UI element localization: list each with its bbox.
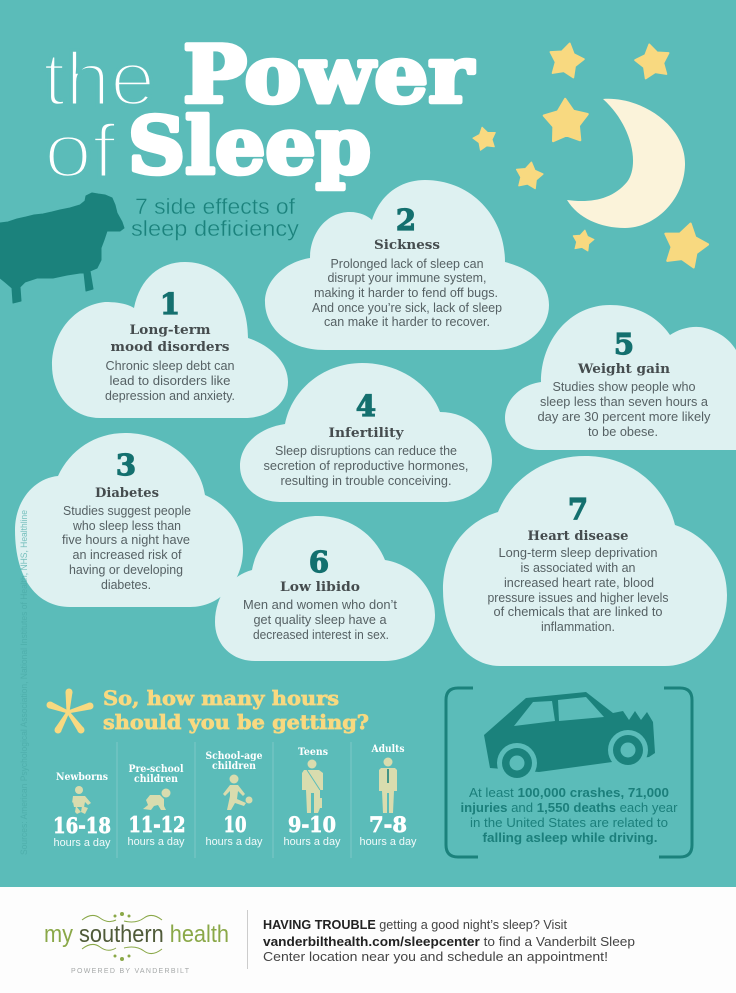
column: adults: Adults — [371, 744, 405, 755]
text: heart body: of chemicals that are linked to — [494, 605, 662, 619]
icon: crawling child — [143, 788, 170, 810]
heading: diabetes: Diabetes — [95, 486, 159, 501]
bracket left — [446, 688, 478, 857]
number 2: 2 — [396, 203, 416, 237]
text: libido body — [243, 598, 397, 642]
text: sickness body — [312, 257, 502, 329]
icon: adult with tie — [379, 758, 397, 813]
bracket right — [659, 688, 692, 857]
text: infertility body: resulting in trouble conceiving. — [280, 474, 452, 488]
text: diabetes body: who sleep less than — [72, 519, 181, 533]
column: newborns: Newborns — [56, 772, 108, 783]
subtitle: sleep deficiency — [131, 216, 299, 241]
column: teens: 9-10 — [288, 812, 336, 837]
text: diabetes body: diabetes. — [101, 578, 151, 592]
text: diabetes body: five hours a night have — [62, 533, 190, 547]
column: teens: Teens — [298, 747, 328, 758]
text: infertility body: Sleep disruptions can reduce the — [275, 444, 457, 458]
title — [43, 28, 474, 194]
column: newborns — [53, 772, 111, 849]
text: footer call to action: HAVING TROUBLE getting a good night’s sleep? Visit — [263, 917, 567, 932]
logo: my southern health: my southern health — [44, 921, 229, 948]
icon: baby — [70, 786, 91, 814]
text: sickness body: And once you’re sick, lack of sleep — [312, 301, 502, 315]
subtitle: 7 side effects of — [135, 194, 296, 219]
number 1: 1 — [160, 287, 180, 321]
text: footer call to action: vanderbilthealth.com/sleepcenter to find a Vanderbilt Sleep — [263, 934, 635, 949]
heading: long-term mood disorders: Long-term — [130, 323, 211, 338]
number 5: 5 — [614, 327, 634, 361]
number 7: 7 — [568, 492, 588, 526]
heading: how many hours — [103, 686, 369, 734]
text: heart body: Long-term sleep deprivation — [498, 546, 658, 560]
panel: cloud 4 infertility — [240, 363, 492, 502]
column: school-age: hours a day — [206, 836, 263, 848]
heading: how many hours: So, how many hours — [103, 686, 339, 710]
heading: how many hours: should you be getting? — [103, 710, 369, 734]
column: school-age: children — [212, 761, 257, 772]
number 3: 3 — [116, 448, 136, 482]
column: pre-school: Pre-school — [128, 764, 184, 775]
text: diabetes body — [62, 504, 191, 592]
column: teens: hours a day — [284, 836, 341, 848]
text: libido body: get quality sleep have a — [254, 613, 386, 627]
text: mood body: Chronic sleep debt can — [106, 359, 234, 373]
text: weight body: Studies show people who — [552, 380, 696, 394]
heading: long-term mood disorders — [110, 323, 230, 355]
text: weight body: sleep less than seven hours a — [540, 395, 708, 409]
text: weight body — [538, 380, 711, 439]
text: driving stats: falling asleep while driving. — [482, 830, 658, 845]
text: mood body: depression and anxiety. — [105, 389, 235, 403]
icon: crashed car — [484, 692, 655, 783]
icon: asterisk — [46, 688, 94, 734]
column: school-age — [206, 751, 263, 848]
title: of — [44, 109, 117, 194]
heading: weight gain: Weight gain — [577, 362, 671, 377]
panel: cloud 6 low libido — [215, 516, 435, 661]
text: infertility body: secretion of reproductive hormones, — [264, 459, 468, 473]
text: driving stats: in the United States are related to — [470, 815, 668, 830]
column: pre-school: hours a day — [128, 836, 185, 848]
column: adults — [360, 744, 417, 848]
text: driving stats — [460, 785, 678, 845]
logo: my southern health — [44, 912, 229, 975]
text: sickness body: making it harder to fend off bugs. — [314, 286, 498, 300]
panel: cloud 2 sickness — [265, 180, 549, 350]
column: school-age: 10 — [224, 812, 246, 837]
text: heart body: pressure issues and higher levels — [488, 591, 668, 605]
text: weight body: to be obese. — [588, 425, 658, 439]
sources note: Sources: American Psychological Association, National Institutes of Health, NHS, Healthline — [19, 510, 30, 855]
footer divider — [247, 910, 248, 969]
text: heart body: increased heart rate, blood — [504, 576, 654, 590]
text: infertility body — [264, 444, 468, 488]
column: pre-school: children — [134, 774, 179, 785]
logo flourish — [82, 915, 162, 954]
title: the — [43, 37, 155, 122]
subtitle — [131, 194, 299, 241]
text: mood body: lead to disorders like — [110, 374, 230, 388]
text: weight body: day are 30 percent more likely — [538, 410, 711, 424]
panel: footer — [0, 887, 736, 993]
column: adults: hours a day — [360, 836, 417, 848]
text: diabetes body: an increased risk of — [72, 548, 182, 562]
dividers — [117, 742, 351, 858]
heading: long-term mood disorders: mood disorders — [110, 340, 230, 355]
heading: heart disease: Heart disease — [528, 529, 628, 544]
panel: cloud 7 heart disease — [443, 456, 727, 666]
text: libido body: Men and women who don’t — [243, 598, 397, 612]
text: heart body — [488, 546, 668, 634]
text: heart body: is associated with an — [520, 561, 636, 575]
text: diabetes body: having or developing — [69, 563, 183, 577]
panel: cloud 3 diabetes — [15, 433, 243, 607]
heading: low libido: Low libido — [280, 580, 360, 595]
text: driving stats: injuries and 1,550 deaths each year — [460, 800, 678, 815]
text: driving stats: At least 100,000 crashes, 71,000 — [469, 785, 669, 800]
text: footer call to action: Center location near you and schedule an appointment! — [263, 949, 608, 964]
icon: teen with bag — [302, 760, 323, 813]
text: sickness body: can make it harder to recover. — [324, 315, 490, 329]
heading: infertility: Infertility — [328, 426, 404, 441]
number 4: 4 — [356, 389, 376, 423]
number 6: 6 — [309, 545, 329, 579]
column: pre-school — [128, 764, 186, 848]
title: Sleep — [128, 101, 371, 192]
column: teens — [284, 747, 341, 848]
column: newborns: 16-18 — [53, 813, 111, 838]
text: sickness body: disrupt your immune system, — [328, 271, 486, 285]
text: footer call to action — [263, 917, 635, 964]
text: libido body: decreased interest in sex. — [253, 628, 389, 642]
icon: child with ball — [223, 774, 252, 810]
column: newborns: hours a day — [54, 837, 111, 849]
text: diabetes body: Studies suggest people — [63, 504, 191, 518]
heading: sickness: Sickness — [374, 238, 440, 253]
column: adults: 7-8 — [369, 812, 407, 837]
title: Power — [183, 28, 474, 121]
text: mood body — [105, 359, 235, 403]
column: pre-school: 11-12 — [128, 812, 186, 837]
panel: cloud 5 weight gain — [505, 305, 736, 450]
logo: my southern health: POWERED BY VANDERBILT — [71, 968, 190, 975]
panel: driving callout — [446, 688, 692, 857]
text: heart body: inflammation. — [541, 620, 615, 634]
text: sickness body: Prolonged lack of sleep can — [330, 257, 484, 271]
icon: moon — [567, 99, 685, 228]
icon: sheep — [0, 193, 124, 303]
column: school-age: School-age — [206, 751, 262, 762]
icon: stars — [471, 40, 712, 269]
panel: cloud 1 mood disorders — [52, 262, 288, 418]
